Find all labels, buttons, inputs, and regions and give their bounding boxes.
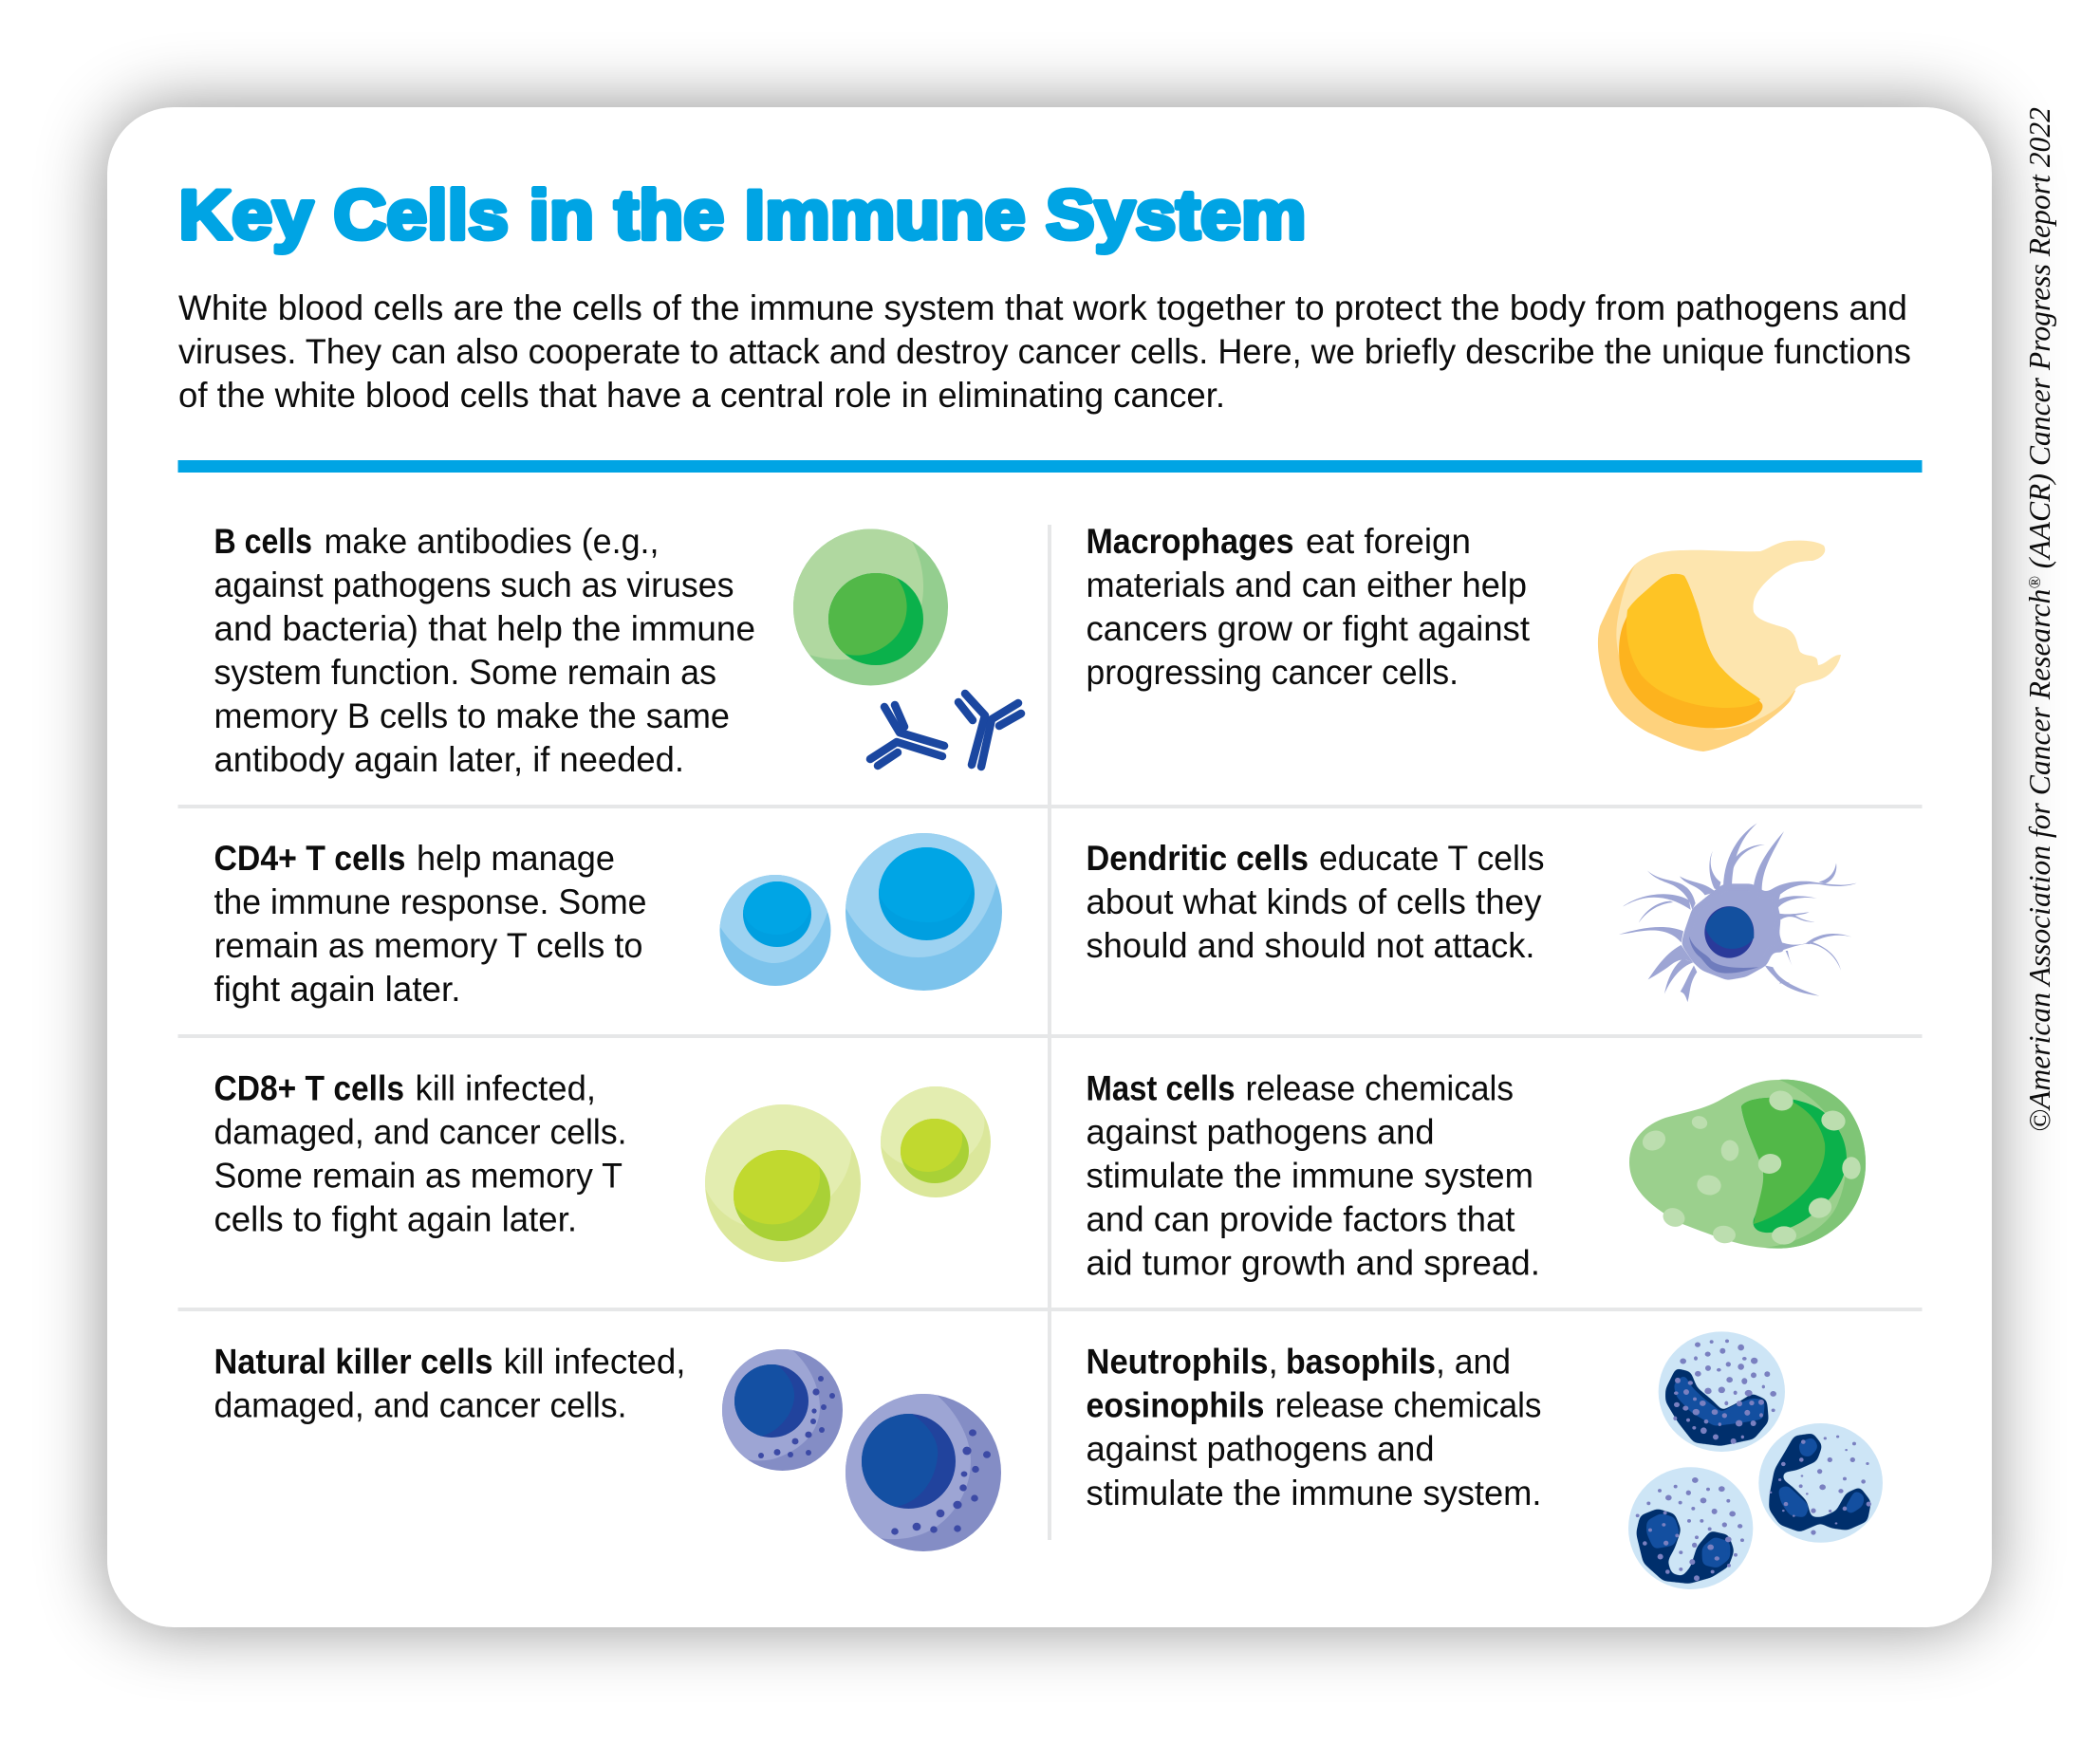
text: Neutrophils, basophils, eosinophils: release chemicals bbox=[1275, 1385, 1541, 1425]
text: Neutrophils, basophils, eosinophils: against pathogens and bbox=[1086, 1429, 1435, 1469]
copyright credit: ® bbox=[2025, 576, 2044, 589]
text: Mast cells: and can provide factors that bbox=[1086, 1199, 1515, 1239]
text: Macrophages: Macrophages bbox=[1086, 522, 1294, 561]
text: Macrophages: progressing cancer cells. bbox=[1086, 653, 1459, 692]
text: B cells: B cells bbox=[214, 522, 312, 561]
icon: B cell bbox=[793, 529, 948, 685]
text: B cells: make antibodies (e.g., bbox=[325, 522, 659, 561]
icon: natural killer cells bbox=[722, 1349, 1001, 1551]
icon: CD8+ T cells bbox=[705, 1086, 991, 1262]
text: Neutrophils, basophils, eosinophils: stimulate the immune system. bbox=[1086, 1474, 1541, 1512]
panel: Natural killer cells bbox=[215, 1347, 1001, 1551]
text: CD8+ T cells: damaged, and cancer cells. bbox=[214, 1112, 626, 1152]
text: Mast cells: Mast cells bbox=[1086, 1068, 1236, 1108]
text: Mast cells bbox=[1086, 1068, 1540, 1283]
icon: mast cell bbox=[1629, 1080, 1866, 1249]
panel: CD8+ T cells bbox=[214, 1068, 1006, 1262]
text: B cells bbox=[214, 522, 755, 779]
text: B cells: system function. Some remain as bbox=[214, 653, 716, 692]
text: Neutrophils, basophils, eosinophils: , bbox=[1268, 1342, 1278, 1382]
text: Neutrophils, basophils, eosinophils: , and bbox=[1436, 1342, 1511, 1382]
text: Mast cells: against pathogens and bbox=[1086, 1112, 1435, 1152]
grid lines bbox=[178, 525, 1923, 1540]
blue divider rule bbox=[178, 460, 1923, 473]
text: Neutrophils, basophils, eosinophils: eosinophils bbox=[1086, 1385, 1264, 1425]
text: CD8+ T cells: CD8+ T cells bbox=[214, 1068, 404, 1108]
icon: CD4+ T cells bbox=[719, 833, 1002, 991]
panel: Neutrophils, basophils, eosinophils bbox=[1086, 1331, 1883, 1589]
text: Natural killer cells: damaged, and cancer cells. bbox=[214, 1385, 626, 1425]
panel: white card with shadow bbox=[107, 107, 1992, 1627]
title: Key Cells in the Immune System bbox=[178, 176, 1306, 254]
panel: Macrophages bbox=[1086, 522, 1841, 751]
icon: dendritic cell bbox=[1619, 824, 1857, 1002]
text: Neutrophils, basophils, eosinophils: basophils bbox=[1286, 1342, 1436, 1382]
text: CD4+ T cells: the immune response. Some bbox=[214, 882, 647, 921]
text: Mast cells: release chemicals bbox=[1245, 1068, 1514, 1108]
panel: B cells bbox=[214, 512, 1021, 779]
panel: Dendritic cells bbox=[1086, 824, 1857, 1002]
copyright credit: (AACR) Cancer Progress Report 2022 bbox=[2022, 107, 2056, 576]
icon: macrophage bbox=[1598, 541, 1841, 751]
text: Macrophages: cancers grow or fight against bbox=[1086, 609, 1531, 648]
text: CD4+ T cells: help manage bbox=[417, 839, 615, 878]
panel: CD4+ T cells bbox=[214, 833, 1002, 1008]
text: Dendritic cells bbox=[1086, 839, 1545, 965]
text: Neutrophils, basophils, eosinophils bbox=[1086, 1342, 1541, 1512]
copyright credit: ©American Association for Cancer Research bbox=[2022, 583, 2056, 1132]
text: CD8+ T cells: cells to fight again later. bbox=[214, 1199, 577, 1239]
panel: Mast cells bbox=[1086, 1068, 1866, 1283]
text: B cells: memory B cells to make the same bbox=[214, 696, 730, 735]
text: Natural killer cells: kill infected, bbox=[503, 1342, 685, 1382]
text: B cells: antibody again later, if needed. bbox=[214, 740, 684, 779]
text: Natural killer cells: Natural killer cells bbox=[214, 1342, 493, 1382]
intro text bbox=[178, 288, 1911, 415]
text: Dendritic cells: should and should not attack. bbox=[1086, 926, 1535, 965]
text: Dendritic cells: educate T cells bbox=[1319, 839, 1545, 878]
text: Macrophages: eat foreign bbox=[1306, 522, 1471, 561]
text: Macrophages: materials and can either help bbox=[1086, 566, 1527, 604]
icon: antibodies bbox=[870, 694, 1021, 767]
text: Neutrophils, basophils, eosinophils: Neutrophils bbox=[1086, 1342, 1268, 1382]
text: Dendritic cells: Dendritic cells bbox=[1086, 839, 1309, 878]
text: CD8+ T cells bbox=[214, 1068, 626, 1239]
intro text: White blood cells are the cells of the immune system that work together to protect the body from pathogens and bbox=[178, 288, 1907, 327]
text: CD8+ T cells: kill infected, bbox=[416, 1068, 596, 1108]
text: Macrophages bbox=[1086, 522, 1531, 692]
text: B cells: against pathogens such as viruses bbox=[214, 566, 734, 604]
intro text: viruses. They can also cooperate to attack and destroy cancer cells. Here, we briefly describe the unique functions bbox=[178, 332, 1911, 371]
text: CD8+ T cells: Some remain as memory T bbox=[214, 1156, 623, 1196]
text: CD4+ T cells bbox=[214, 839, 647, 1009]
text: Mast cells: stimulate the immune system bbox=[1086, 1156, 1533, 1196]
icon: granulocytes bbox=[1628, 1331, 1883, 1589]
text: B cells: and bacteria) that help the immune bbox=[214, 609, 755, 648]
text: Dendritic cells: about what kinds of cells they bbox=[1086, 882, 1542, 921]
text: CD4+ T cells: remain as memory T cells to bbox=[214, 926, 643, 965]
intro text: of the white blood cells that have a central role in eliminating cancer. bbox=[178, 376, 1225, 415]
text: CD4+ T cells: fight again later. bbox=[214, 970, 461, 1009]
text: Natural killer cells bbox=[214, 1342, 685, 1425]
text: Mast cells: aid tumor growth and spread. bbox=[1086, 1243, 1540, 1283]
text: CD4+ T cells: CD4+ T cells bbox=[214, 839, 406, 878]
